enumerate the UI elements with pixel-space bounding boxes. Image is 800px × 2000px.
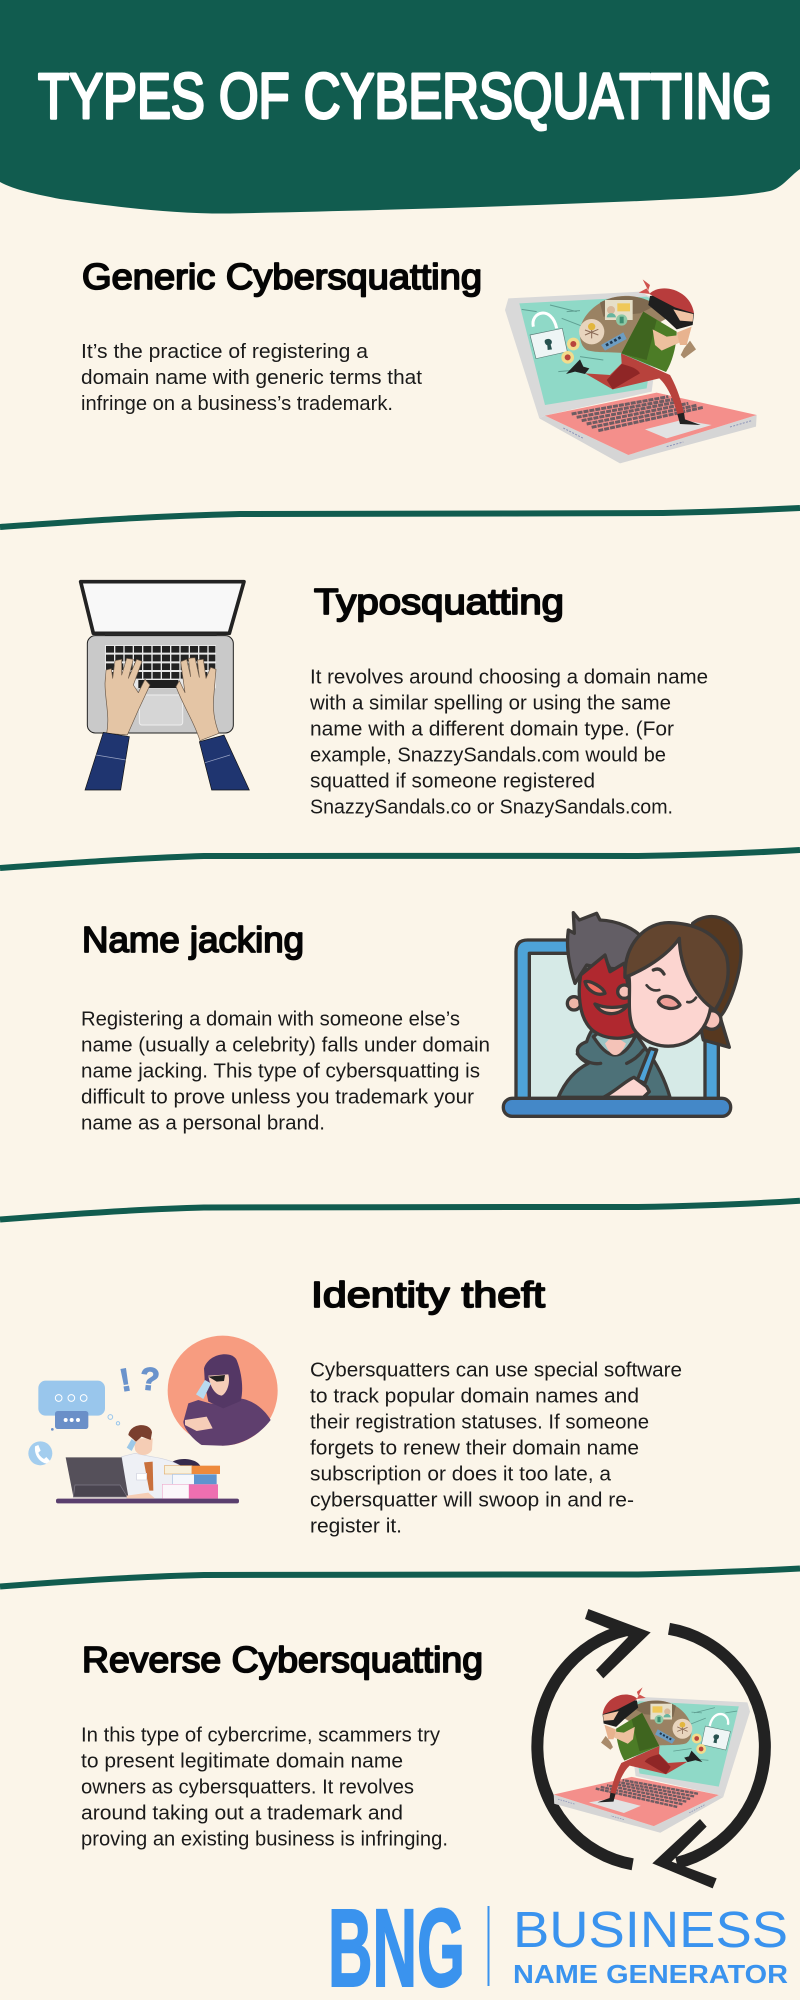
text block: identity theft: subscription or does it too late, a — [310, 1464, 612, 1486]
divider 1 — [0, 508, 800, 527]
stack of books — [162, 1466, 220, 1499]
icon: hands typing on laptop — [81, 582, 249, 790]
text block: name jacking: Registering a domain with someone else’s — [81, 1009, 460, 1031]
text block: name jacking: difficult to prove unless you trademark your — [81, 1087, 474, 1109]
thief body — [585, 353, 684, 414]
text block: identity theft: Cybersquatters can use special software — [310, 1360, 682, 1382]
text block: typosquatting: squatted if someone registered — [310, 771, 595, 793]
text block: identity theft — [310, 1360, 682, 1538]
logo: business name generator — [328, 1887, 788, 2000]
sleeves — [85, 732, 129, 790]
padlock — [533, 313, 557, 328]
sack — [580, 296, 667, 353]
text block: generic cybersquatting — [81, 341, 422, 415]
divider 2 — [0, 850, 800, 868]
text block: identity theft: register it. — [310, 1516, 402, 1538]
logo: business name generator: NAME GENERATOR — [513, 1959, 788, 1989]
desk — [56, 1499, 239, 1503]
panel: typosquatting — [81, 581, 708, 819]
illustration: phone scam at a desk — [28, 1336, 278, 1503]
text block: reverse cybersquatting: proving an existing business is infringing. — [81, 1829, 448, 1851]
text block: generic cybersquatting: domain name with generic terms that — [81, 367, 422, 389]
panel: name jacking — [81, 913, 741, 1135]
text block: reverse cybersquatting — [81, 1725, 448, 1851]
text block: reverse cybersquatting: around taking out a trademark and — [81, 1803, 403, 1825]
icon: thief running out of laptop — [505, 279, 757, 463]
text block: typosquatting: example, SnazzySandals.com would be — [310, 745, 666, 767]
text block: name jacking: name jacking. This type of cybersquatting is — [81, 1061, 480, 1083]
text block: reverse cybersquatting: to present legitimate domain name — [81, 1751, 403, 1773]
window sill — [503, 1098, 731, 1116]
text block: name jacking — [81, 1009, 490, 1135]
panel: generic cybersquatting — [81, 256, 757, 463]
text block: identity theft: their registration statuses. If someone — [310, 1412, 649, 1434]
right hand — [176, 658, 219, 741]
text block: name jacking: name as a personal brand. — [81, 1113, 325, 1135]
icon: circular arrows around thief — [537, 1609, 765, 1888]
illustration: phone scam at a desk: ? — [138, 1360, 161, 1398]
text block: reverse cybersquatting: owners as cybersquatters. It revolves — [81, 1777, 414, 1799]
man hoodie — [558, 1031, 670, 1097]
text block: identity theft: to track popular domain names and — [310, 1386, 639, 1408]
heading: generic cybersquatting: Generic Cybersquatting — [82, 256, 482, 297]
text block: typosquatting: SnazzySandals.co or SnazySandals.com. — [310, 797, 673, 819]
text block: typosquatting: with a similar spelling or using the same — [309, 693, 671, 715]
mirrored thief on laptop — [554, 1687, 750, 1833]
heading: name jacking: Name jacking — [82, 919, 304, 960]
heading: reverse cybersquatting: Reverse Cybersquatting — [82, 1639, 483, 1680]
text block: identity theft: cybersquatter will swoop in and re- — [310, 1490, 634, 1512]
exclamation and question marks: ! — [117, 1361, 134, 1399]
divider 4 — [0, 1568, 800, 1586]
hooded caller in circle — [168, 1336, 278, 1446]
woman mask — [693, 917, 741, 1047]
text block: typosquatting — [309, 667, 708, 819]
stick and hand — [637, 1048, 657, 1083]
divider 3 — [0, 1201, 800, 1220]
arrows — [537, 1609, 765, 1888]
desk worker — [66, 1425, 201, 1498]
text block: typosquatting: It revolves around choosing a domain name — [310, 667, 708, 689]
heading: identity theft: Identity theft — [311, 1274, 545, 1315]
text block: generic cybersquatting: It’s the practice of registering a — [81, 341, 369, 363]
text block: identity theft: forgets to renew their domain name — [310, 1438, 639, 1460]
red mask — [579, 955, 637, 1038]
text block: generic cybersquatting: infringe on a business’s trademark. — [81, 393, 393, 415]
phone icon — [28, 1441, 52, 1465]
man hair — [567, 913, 643, 983]
text block: reverse cybersquatting: In this type of cybercrime, scammers try — [81, 1725, 440, 1747]
text block: name jacking: name (usually a celebrity) falls under domain — [81, 1035, 490, 1057]
left hand — [105, 658, 150, 735]
panel: identity theft — [28, 1274, 682, 1538]
heading: typosquatting: Typosquatting — [314, 581, 564, 622]
icon: man hiding behind a woman's face mask in a laptop window — [503, 913, 741, 1116]
logo: business name generator: BUSINESS — [513, 1901, 788, 1958]
text block: typosquatting: name with a different domain type. (For — [310, 719, 674, 741]
header banner with title — [0, 0, 800, 214]
panel: reverse cybersquatting — [81, 1609, 765, 1888]
chat bubbles — [38, 1381, 120, 1431]
